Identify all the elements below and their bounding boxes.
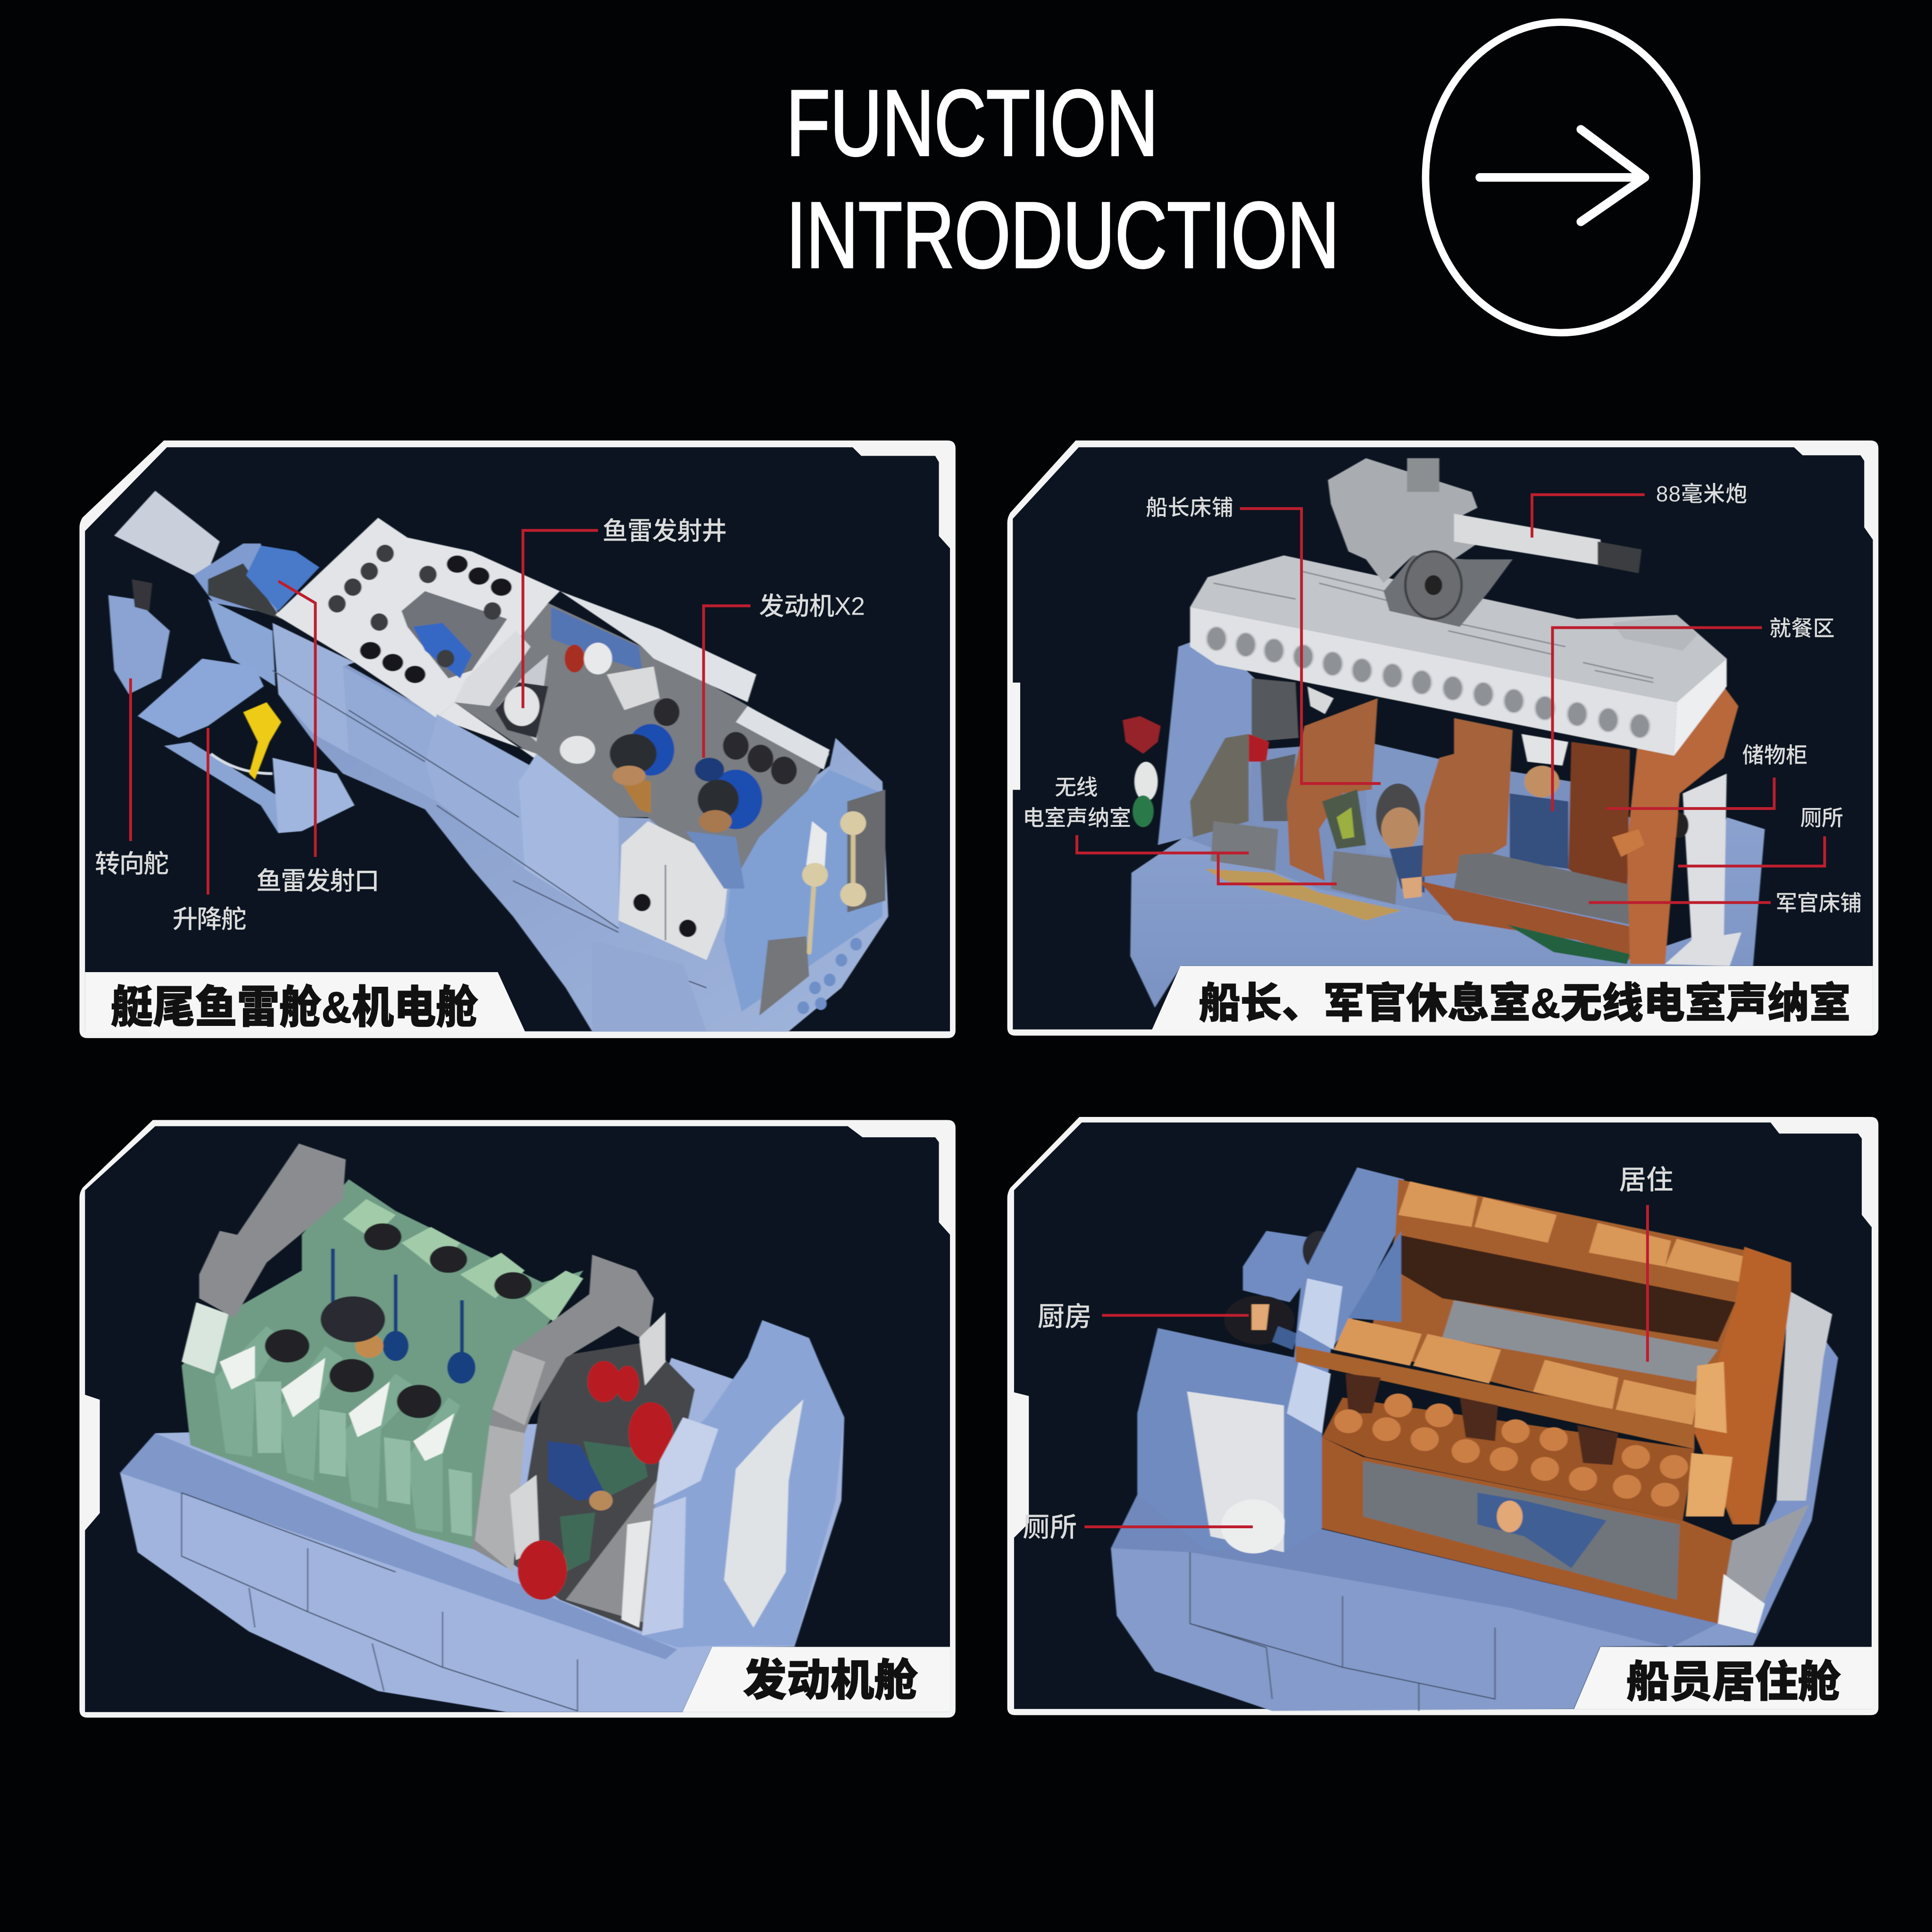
label: torpedo tube: 鱼雷发射井 (602, 517, 727, 545)
label: lockers: 储物柜 (1742, 743, 1807, 767)
caption: crew quarters: 船员居住舱 (1626, 1658, 1841, 1706)
panel frame (1008, 1117, 1878, 1715)
model: engine room (120, 1143, 844, 1712)
title: INTRODUCTION (786, 183, 1340, 288)
panel: engine room (79, 1120, 956, 1717)
caption tab (683, 1647, 950, 1712)
label: officer bunk: 军官床铺 (1775, 891, 1862, 915)
caption: engine room: 发动机舱 (743, 1656, 918, 1705)
label: 88mm gun: 88毫米炮 (1656, 482, 1747, 506)
leader lines: crew quarters (1084, 1205, 1648, 1527)
label: toilet: 厕所 (1800, 806, 1843, 830)
label: dining area: 就餐区 (1769, 616, 1835, 641)
title: FUNCTION (786, 71, 1158, 175)
caption: stern torpedo and electric room: 艇尾鱼雷舱&机电舱 (111, 983, 478, 1032)
model: officer rooms with deck gun (1123, 458, 1765, 1008)
panel: stern torpedo and electric room (79, 441, 956, 1038)
caption tab (1152, 966, 1873, 1030)
title (786, 71, 1340, 288)
label: captain bunk: 船长床铺 (1146, 495, 1233, 520)
label: radio and sonar room: 无线 (1055, 775, 1098, 799)
panel frame (79, 441, 956, 1038)
caption tab (1574, 1647, 1873, 1709)
label: kitchen: 厨房 (1038, 1302, 1091, 1332)
panel: crew quarters (1008, 1117, 1878, 1715)
label: torpedo port: 鱼雷发射口 (256, 867, 380, 895)
label: living quarters: 居住 (1619, 1165, 1673, 1195)
panel frame (1008, 441, 1878, 1036)
label: engines x2: 发动机X2 (759, 593, 865, 621)
label: elevator: 升降舵 (173, 906, 246, 933)
panel frame (79, 1120, 956, 1717)
model: crew quarters (1111, 1167, 1838, 1711)
caption: captain and officer rooms: 船长、军官休息室&无线电室声纳室 (1199, 980, 1851, 1027)
panel: captain and officer rooms (1008, 441, 1878, 1036)
icon: circled arrow (1425, 22, 1697, 333)
panel inner background (85, 1126, 950, 1712)
label: radio and sonar room (1023, 775, 1131, 830)
panel inner background (85, 447, 950, 1031)
label: toilet: 厕所 (1023, 1512, 1077, 1542)
panel inner background (1013, 447, 1873, 1030)
caption tab (85, 972, 525, 1031)
label: rudder: 转向舵 (95, 850, 169, 878)
model: stern section (108, 491, 888, 1032)
panel inner background (1014, 1123, 1872, 1709)
leader lines: officer rooms (1077, 495, 1824, 902)
label: radio and sonar room: 电室声纳室 (1023, 806, 1131, 830)
leader lines: stern section (131, 531, 750, 895)
